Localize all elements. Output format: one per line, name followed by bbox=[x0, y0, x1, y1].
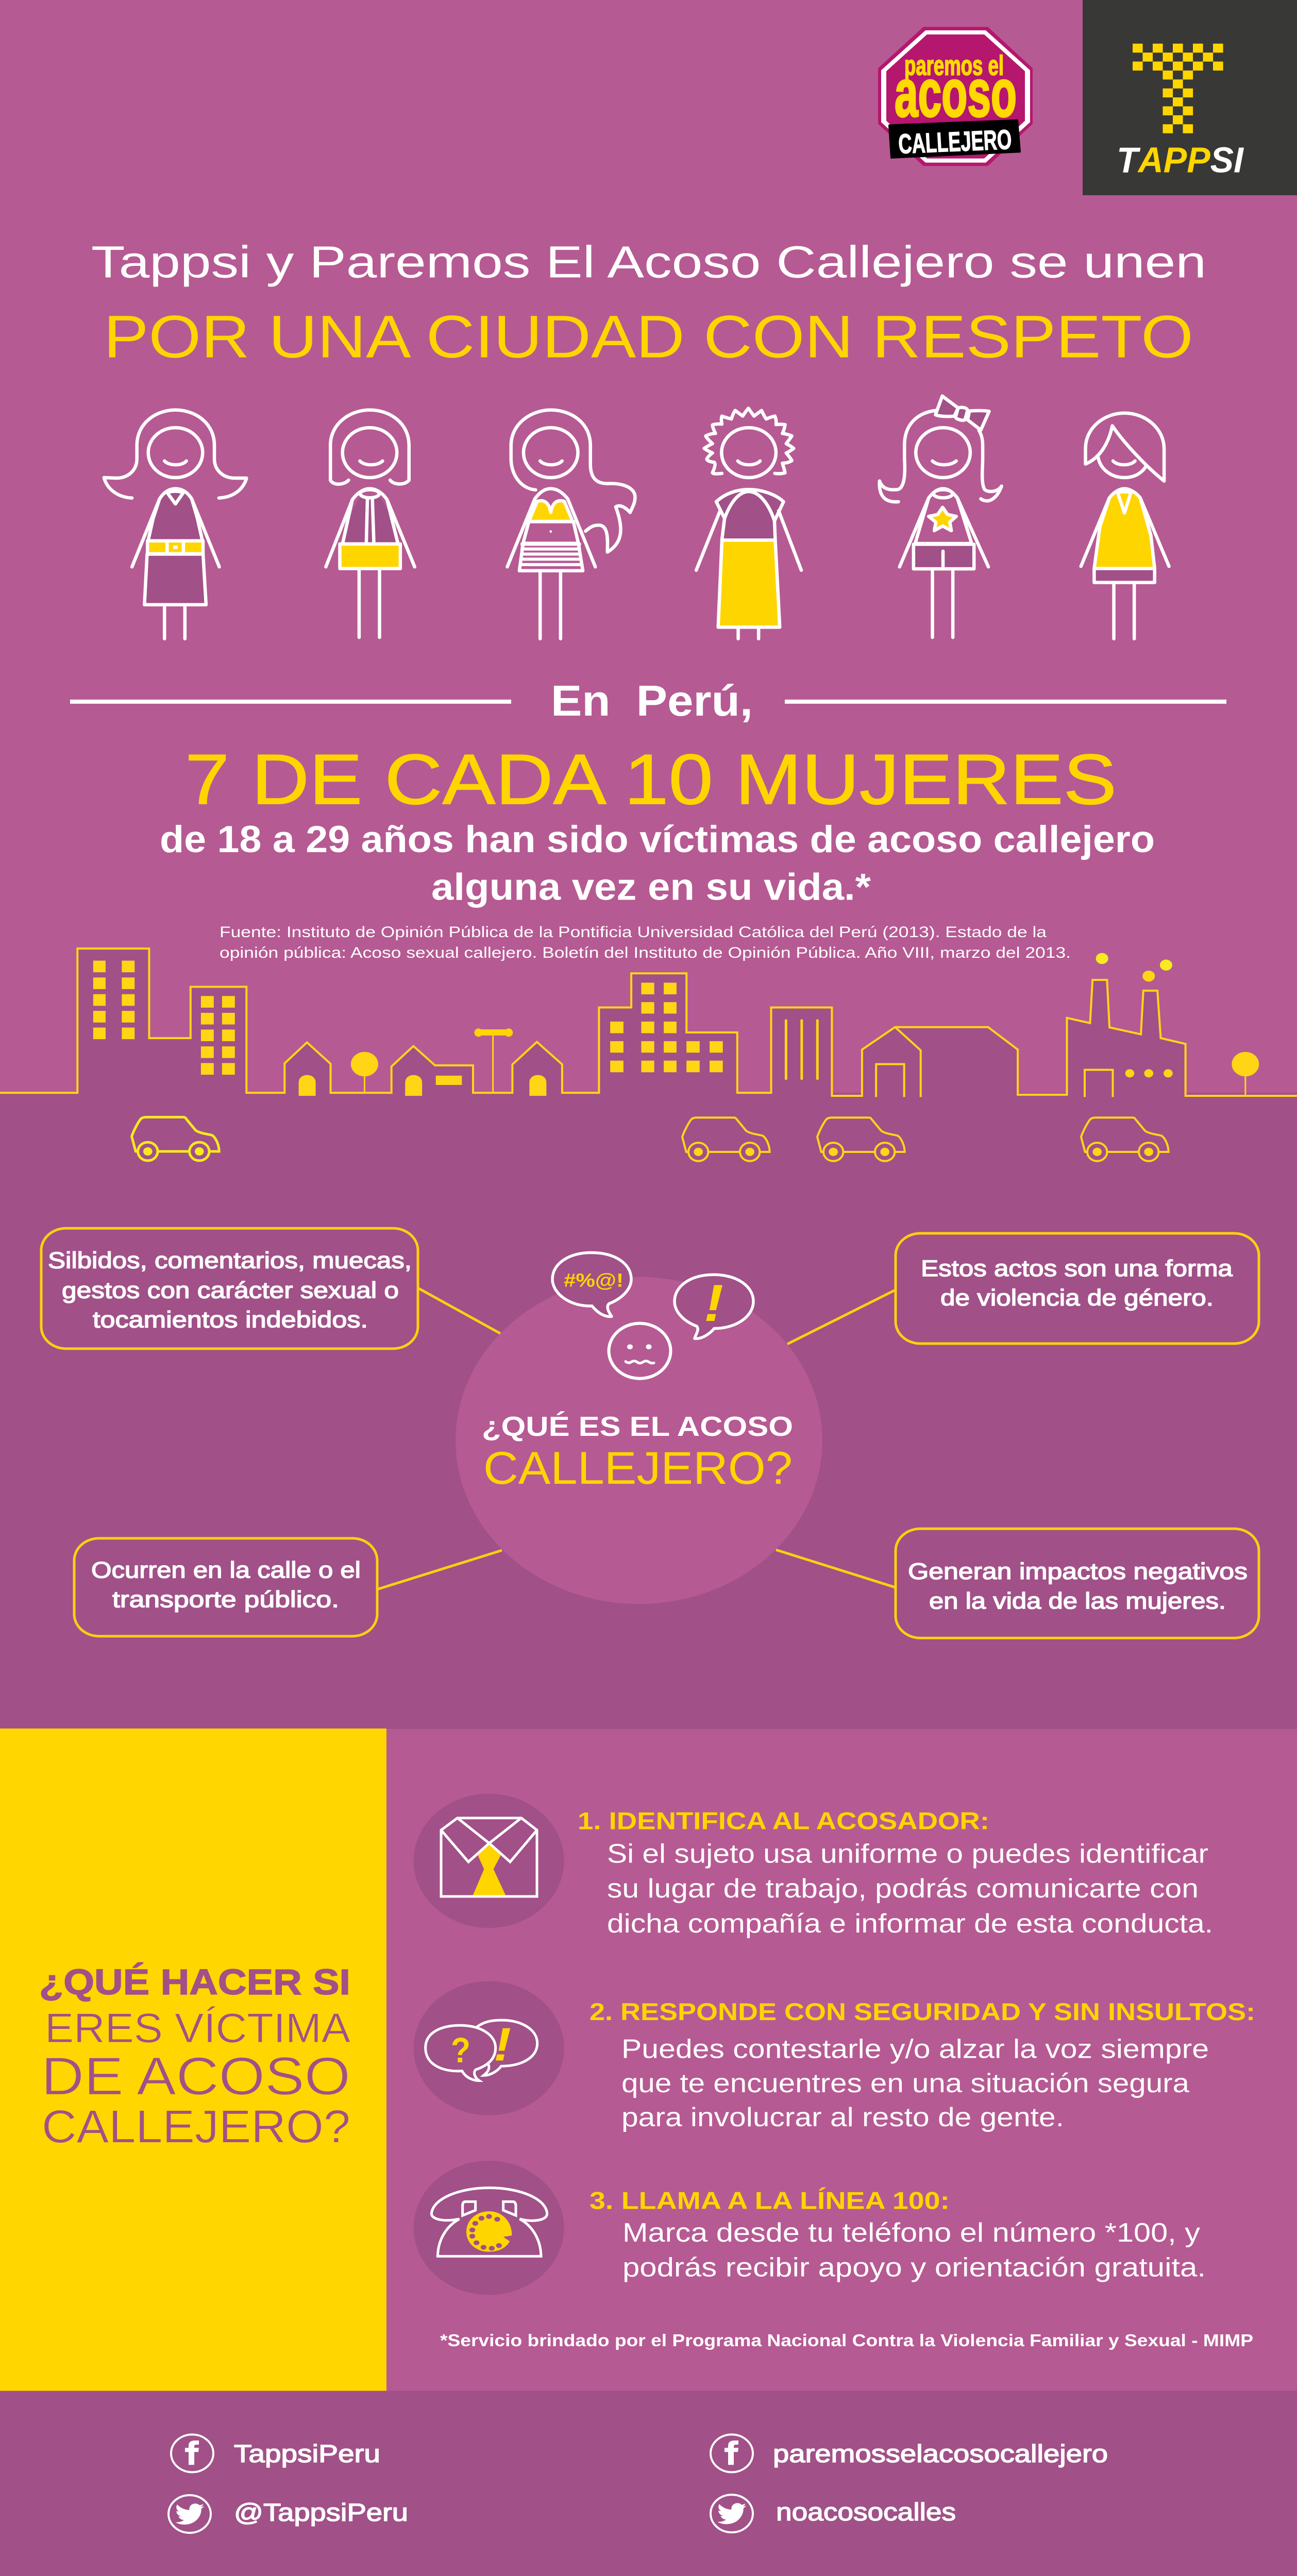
illustration: city skyline bbox=[0, 948, 1297, 1103]
icon: two speech bubbles: ? bbox=[451, 2031, 470, 2070]
windows, doors, smoke and tree (right half) bbox=[649, 953, 1259, 1097]
heading: que es el acoso callejero bbox=[482, 1411, 793, 1494]
text block: step 2 bbox=[589, 1998, 1255, 2132]
callout: violencia de genero: de violencia de género. bbox=[940, 1285, 1214, 1311]
callout: impactos negativos: Generan impactos negativos bbox=[908, 1559, 1248, 1585]
text block: step 1 bbox=[578, 1807, 1213, 1938]
footnote: *Servicio brindado por el Programa Nacional Contra la Violencia Familiar y Sexual - MIMP bbox=[440, 2331, 1253, 2350]
text block: step 3 bbox=[589, 2187, 1206, 2282]
text block: step 1: su lugar de trabajo, podrás comunicarte con bbox=[607, 1873, 1199, 1903]
heading: En Peru with rules: En Perú, bbox=[551, 677, 753, 725]
icon: car 3 bbox=[817, 1117, 905, 1161]
text block: step 2: que te encuentres en una situación segura bbox=[621, 2068, 1189, 2098]
panel: central circle bbox=[456, 1277, 822, 1604]
social: twitter noacosocalles: noacosocalles bbox=[776, 2498, 956, 2526]
social: facebook paremosselacosocallejero bbox=[711, 2434, 1108, 2472]
figure 2: woman with yellow skirt bbox=[326, 410, 415, 637]
text block: step 3: podrás recibir apoyo y orientación gratuita. bbox=[622, 2252, 1206, 2282]
text block: statistic description: de 18 a 29 años han sido víctimas de acoso callejero bbox=[160, 819, 1155, 860]
icon: speech bubble with exclamation: ! bbox=[704, 1274, 723, 1332]
icon: shirt and tie bbox=[414, 1794, 564, 1928]
heading: En Peru with rules bbox=[70, 677, 1226, 725]
icon: speech bubble with symbols: #%@! bbox=[564, 1269, 624, 1291]
windows, doors, trees and lamp (left half) bbox=[93, 961, 651, 1096]
figure 5: woman with bow and star bbox=[880, 396, 1002, 637]
icon: worried face bbox=[609, 1324, 671, 1379]
text block: statistic description: alguna vez en su vida.* bbox=[431, 867, 871, 908]
icon: car 1 bbox=[132, 1117, 219, 1161]
icon: car 4 bbox=[1081, 1117, 1169, 1161]
icon: car 2 bbox=[682, 1117, 770, 1161]
text: TAPPSI wordmark: TAPPSI bbox=[1117, 140, 1244, 180]
panel: Paremos el Acoso Callejero logo: paremos el bbox=[904, 50, 1004, 81]
callout: impactos negativos bbox=[896, 1529, 1259, 1638]
text block: step 1: Si el sujeto usa uniforme o puedes identificar bbox=[607, 1838, 1208, 1869]
callout: violencia de genero: Estos actos son una forma bbox=[921, 1256, 1233, 1281]
heading: Por una ciudad con respeto: POR UNA CIUDAD CON RESPETO bbox=[104, 303, 1193, 370]
text block: step 3: 3. LLAMA A LA LÍNEA 100: bbox=[589, 2187, 950, 2214]
social: twitter noacosocalles bbox=[711, 2495, 956, 2532]
figure 1: woman with belted dress bbox=[104, 410, 246, 639]
panel: what to do, yellow heading: CALLEJERO? bbox=[42, 2100, 350, 2153]
figure 4: woman with curly hair and long yellow skirt bbox=[696, 408, 801, 639]
icon: speech bubble with exclamation bbox=[675, 1274, 753, 1338]
social: facebook TappsiPeru bbox=[171, 2434, 380, 2472]
social: facebook paremosselacosocallejero: paremosselacosocallejero bbox=[773, 2440, 1108, 2467]
text block: step 2: 2. RESPONDE CON SEGURIDAD Y SIN INSULTOS: bbox=[589, 1998, 1255, 2026]
text block: step 1: 1. IDENTIFICA AL ACOSADOR: bbox=[578, 1807, 989, 1835]
heading: que es el acoso callejero: CALLEJERO? bbox=[483, 1443, 793, 1494]
connector lines to central circle bbox=[377, 1288, 896, 1589]
panel: what to do, yellow heading: DE ACOSO bbox=[41, 2046, 350, 2106]
social: twitter @TappsiPeru bbox=[169, 2495, 408, 2533]
social: twitter @TappsiPeru: @TappsiPeru bbox=[234, 2499, 408, 2526]
panel: Paremos el Acoso Callejero logo: CALLEJERO bbox=[898, 125, 1013, 160]
callout: impactos negativos: en la vida de las mujeres. bbox=[929, 1588, 1226, 1614]
text block: step 2: Puedes contestarle y/o alzar la voz siempre bbox=[621, 2033, 1209, 2064]
heading: que es el acoso callejero: ¿QUÉ ES EL ACOSO bbox=[482, 1411, 793, 1442]
text block: source: opinión pública: Acoso sexual callejero. Boletín del Instituto de Opinión Pública. Año VIII, marzo del 2013. bbox=[220, 944, 1071, 961]
text block: statistic description bbox=[160, 819, 1155, 908]
illustration: three women, right bbox=[696, 396, 1169, 639]
text block: source: Fuente: Instituto de Opinión Pública de la Pontificia Universidad Católica del Perú (2013). Estado de la bbox=[220, 923, 1047, 940]
text block: step 1: dicha compañía e informar de esta conducta. bbox=[607, 1908, 1213, 1938]
callout: silbidos bbox=[41, 1228, 418, 1349]
panel: what to do, yellow heading: ¿QUÉ HACER SI bbox=[39, 1962, 350, 2002]
figure 6: woman with side-swept bangs bbox=[1081, 413, 1169, 639]
callout: calle o transporte: Ocurren en la calle o el bbox=[91, 1557, 361, 1583]
figure 3: woman with long wavy hair and stripes bbox=[507, 410, 635, 639]
panel: what to do, yellow heading: ERES VÍCTIMA bbox=[45, 2005, 350, 2052]
callout: calle o transporte: transporte público. bbox=[112, 1587, 339, 1613]
panel: footer bbox=[0, 2391, 1297, 2576]
social: facebook TappsiPeru: TappsiPeru bbox=[234, 2440, 380, 2467]
text block: source bbox=[220, 923, 1071, 961]
statistic: 7 de cada 10 mujeres: 7 DE CADA 10 MUJERES bbox=[185, 740, 1117, 819]
icon: speech bubble with symbols bbox=[552, 1252, 631, 1316]
heading: Tappsi y Paremos: Tappsi y Paremos El Acoso Callejero se unen bbox=[91, 236, 1206, 287]
callout: silbidos: tocamientos indebidos. bbox=[93, 1307, 368, 1333]
illustration: three women, left bbox=[104, 410, 635, 639]
panel: dark section background bbox=[0, 1093, 1297, 1729]
icon: checkered taxi T bbox=[1133, 44, 1223, 133]
callout: calle o transporte bbox=[74, 1538, 377, 1636]
callout: violencia de genero bbox=[896, 1233, 1259, 1344]
icon: rotary telephone bbox=[414, 2161, 564, 2295]
panel: Paremos el Acoso Callejero logo bbox=[880, 28, 1031, 164]
icon: star bbox=[929, 507, 956, 531]
panel: Tappsi logo bbox=[1083, 0, 1297, 195]
callout: silbidos: gestos con carácter sexual o bbox=[62, 1278, 399, 1303]
text block: step 3: Marca desde tu teléfono el número *100, y bbox=[622, 2217, 1201, 2247]
icon: two speech bubbles bbox=[414, 1981, 564, 2115]
panel: what to do, yellow heading bbox=[0, 1728, 386, 2391]
text block: step 2: para involucrar al resto de gente. bbox=[621, 2102, 1064, 2132]
callout: silbidos: Silbidos, comentarios, muecas, bbox=[48, 1248, 412, 1274]
panel: Paremos el Acoso Callejero logo: acoso bbox=[895, 56, 1017, 131]
icon: hair bow bbox=[935, 396, 989, 430]
icon: two speech bubbles: ! bbox=[494, 2019, 511, 2071]
